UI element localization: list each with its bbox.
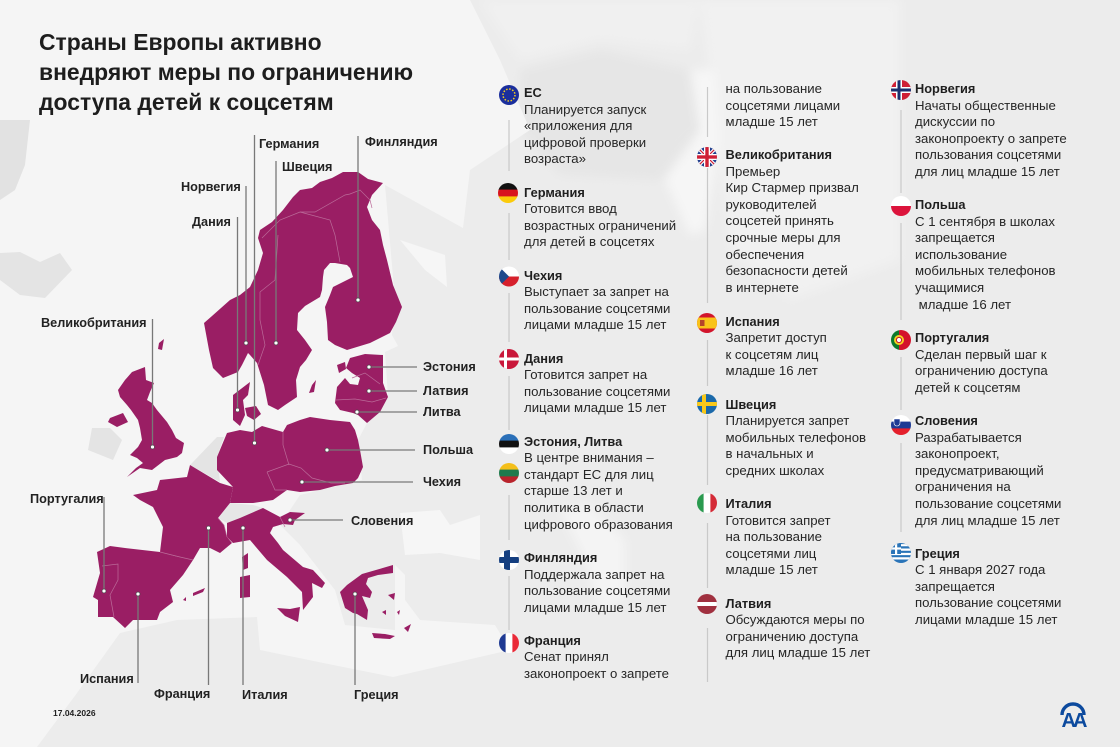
entry: Latvia: Латвия xyxy=(726,596,771,611)
entry: France continued: соцсетями лицами xyxy=(726,98,840,113)
flag: France xyxy=(499,633,519,653)
entry: Greece: С 1 января 2027 года xyxy=(915,562,1045,577)
entry: Spain: к соцсетям лиц xyxy=(726,347,818,362)
entry: France: Сенат принял xyxy=(524,649,609,664)
entry: EU: цифровой проверки xyxy=(524,135,646,150)
entry: Latvia: для лиц младше 15 лет xyxy=(726,645,870,660)
entry: Germany: Германия xyxy=(524,185,585,200)
entry: Norway: дискуссии по xyxy=(915,114,995,129)
entry: Germany xyxy=(524,185,676,249)
text: Португалия xyxy=(30,492,104,506)
text: Норвегия xyxy=(181,180,241,194)
entry: Estonia, Lithuania: стандарт ЕС для лиц xyxy=(524,467,654,482)
entry: Denmark: лицами младше 15 лет xyxy=(524,400,666,415)
entry: Slovenia: для лиц младше 15 лет xyxy=(915,513,1060,528)
entry: Italy: соцсетями лиц xyxy=(726,546,816,561)
text: Чехия xyxy=(423,475,461,489)
entry: Estonia, Lithuania: В центре внимания – xyxy=(524,450,654,465)
entry: United Kingdom: Великобритания xyxy=(726,147,832,162)
entry: United Kingdom: безопасности детей xyxy=(726,263,848,278)
title: внедряют меры по ограничению xyxy=(39,59,413,85)
flag: Denmark xyxy=(499,349,519,369)
entry: Estonia, Lithuania: старше 13 лет и xyxy=(524,483,623,498)
map: Denmark xyxy=(233,382,250,426)
flag: Lithuania xyxy=(499,463,519,483)
title xyxy=(39,29,413,115)
entry: Italy: Готовится запрет xyxy=(726,513,830,528)
entry: Portugal: ограничению доступа xyxy=(915,363,1048,378)
entry: Poland: С 1 сентября в школах xyxy=(915,214,1055,229)
map: Spain and Portugal xyxy=(93,546,193,628)
entry: EU: ЕС xyxy=(524,85,542,100)
entry: Poland: запрещается xyxy=(915,230,995,245)
map: Baltic states xyxy=(335,354,388,423)
entry: Sweden xyxy=(726,397,866,478)
text: Литва xyxy=(423,405,461,419)
flag: Finland xyxy=(499,550,519,570)
entry: Greece: Греция xyxy=(915,546,960,561)
entry: Italy: Италия xyxy=(726,496,772,511)
entry: Poland: учащимися xyxy=(915,280,984,295)
logo: Anadolu Agency: AA xyxy=(1062,710,1087,732)
entry: Czechia: Выступает за запрет на xyxy=(524,284,669,299)
text: Испания xyxy=(80,672,134,686)
text: Италия xyxy=(242,688,288,702)
entry: Latvia: Обсуждаются меры по xyxy=(726,612,865,627)
entry: Slovenia: Разрабатывается xyxy=(915,430,1022,445)
entry: Italy: на пользование xyxy=(726,529,822,544)
entry: Slovenia: ограничения на xyxy=(915,479,1011,494)
entry: Finland: Поддержала запрет на xyxy=(524,567,665,582)
entry: Greece xyxy=(915,546,1061,627)
entry: Spain: Запретит доступ xyxy=(726,330,827,345)
entry: Estonia, Lithuania xyxy=(524,434,673,532)
text: Швеция xyxy=(282,160,332,174)
flag: Poland xyxy=(891,196,911,216)
date: 17.04.2026 xyxy=(53,708,96,718)
entry: United Kingdom: в интернете xyxy=(726,280,799,295)
entry: Slovenia: пользование соцсетями xyxy=(915,496,1061,511)
entry: EU xyxy=(524,85,646,166)
entry: Denmark: Готовится запрет на xyxy=(524,367,647,382)
flag: Germany xyxy=(498,183,518,203)
entry: Norway: Норвегия xyxy=(915,81,975,96)
entry: Slovenia xyxy=(915,413,1061,528)
map: highlighted countries of Europe xyxy=(93,172,411,639)
text: Греция xyxy=(354,688,399,702)
entry: Latvia: ограничению доступа xyxy=(726,629,858,644)
entry: Norway: для лиц младше 15 лет xyxy=(915,164,1060,179)
flag: Italy xyxy=(697,493,717,513)
entry: Spain: Испания xyxy=(726,314,780,328)
entry: Poland: использование xyxy=(915,247,1007,262)
text: Польша xyxy=(423,443,473,457)
entry: Italy xyxy=(726,496,830,577)
entry: Denmark xyxy=(524,351,670,415)
entry: EU: Планируется запуск xyxy=(524,102,646,117)
flag: United Kingdom xyxy=(697,147,717,167)
entry: Slovenia: предусматривающий xyxy=(915,463,1044,478)
entry: Slovenia: законопроект, xyxy=(915,446,1000,461)
text: Франция xyxy=(154,687,210,701)
entry: France: Франция xyxy=(524,633,581,648)
entry: United Kingdom: руководителей xyxy=(726,197,817,212)
entry: Czechia: лицами младше 15 лет xyxy=(524,317,666,332)
entry: Sweden: Швеция xyxy=(726,397,776,412)
map: Scandinavia and Finland xyxy=(204,172,402,410)
entry: Greece: лицами младше 15 лет xyxy=(915,612,1057,627)
flag: Czechia xyxy=(499,266,519,286)
entry: Poland: младше 16 лет xyxy=(919,297,1011,312)
entry: Finland xyxy=(524,550,670,615)
entry: Slovenia: Словения xyxy=(915,413,978,428)
title: Страны Европы активно xyxy=(39,29,322,55)
entry: Spain xyxy=(726,314,827,378)
flag: EU xyxy=(499,85,519,105)
map: United Kingdom xyxy=(118,367,184,477)
map dots xyxy=(102,298,371,596)
entry: Portugal xyxy=(915,330,1048,395)
entry: Portugal: Португалия xyxy=(915,330,989,345)
map: Germany, Poland and Czechia xyxy=(217,417,363,503)
entry: Portugal: Сделан первый шаг к xyxy=(915,347,1047,362)
entry: Norway: пользования соцсетями xyxy=(915,147,1061,162)
map: France xyxy=(133,465,233,560)
entry: Denmark: Дания xyxy=(524,351,563,366)
flag: Slovenia xyxy=(891,415,911,435)
entry: United Kingdom: Премьер xyxy=(726,164,780,179)
entry: Norway: законопроекту о запрете xyxy=(915,131,1067,146)
flag: Estonia xyxy=(499,434,519,454)
entry: Denmark: пользование соцсетями xyxy=(524,384,670,399)
flag: Norway xyxy=(891,80,911,100)
entry: Germany: возрастных ограничений xyxy=(524,218,676,233)
entry: Germany: Готовится ввод xyxy=(524,201,617,216)
entry: United Kingdom: срочные меры для xyxy=(726,230,841,245)
map leaders: country pointers xyxy=(104,135,417,685)
entry: Estonia, Lithuania: политика в области xyxy=(524,500,644,515)
entry: Finland: лицами младше 15 лет xyxy=(524,600,666,615)
entry: Sweden: мобильных телефонов xyxy=(726,430,866,445)
entry: United Kingdom: соцсетей принять xyxy=(726,213,834,228)
entry: Poland: Польша xyxy=(915,197,965,212)
title: доступа детей к соцсетям xyxy=(39,89,334,115)
text: Эстония xyxy=(423,360,476,374)
entry: Sweden: в начальных и xyxy=(726,446,814,461)
entry: Finland: пользование соцсетями xyxy=(524,583,670,598)
entry: Poland xyxy=(915,197,1056,312)
entry: Poland: мобильных телефонов xyxy=(915,263,1056,278)
text: Дания xyxy=(192,215,231,229)
entry: Portugal: детей к соцсетям xyxy=(915,380,1020,395)
entry: United Kingdom xyxy=(726,147,859,295)
entry: Spain: младше 16 лет xyxy=(726,363,818,378)
entry: Sweden: Планируется запрет xyxy=(726,413,849,428)
entry: Greece: пользование соцсетями xyxy=(915,595,1061,610)
entry: EU: «приложения для xyxy=(524,118,632,133)
text: Словения xyxy=(351,514,413,528)
entry: Estonia, Lithuania: цифрового образования xyxy=(524,517,673,532)
entry: Czechia xyxy=(524,268,670,332)
entry: France continued: младше 15 лет xyxy=(726,114,818,129)
entry: France: законопроект о запрете xyxy=(524,666,669,681)
entry: Norway xyxy=(915,81,1067,179)
map: Greece xyxy=(340,565,393,620)
text: Великобритания xyxy=(41,316,147,330)
map: Italy and Slovenia xyxy=(227,508,325,610)
entry: United Kingdom: обеспечения xyxy=(726,247,804,262)
entry: Czechia: пользование соцсетями xyxy=(524,301,670,316)
entry: Germany: для детей в соцсетях xyxy=(524,234,654,249)
entry: Norway: Начаты общественные xyxy=(915,98,1056,113)
entry: France continued: на пользование xyxy=(726,81,822,96)
entry: Estonia, Lithuania: Эстония, Литва xyxy=(524,434,622,449)
flag: Spain xyxy=(697,313,717,333)
entry: Finland: Финляндия xyxy=(524,550,597,565)
map: internal borders xyxy=(102,190,386,617)
flag: Latvia xyxy=(697,594,717,614)
map labels: Германия xyxy=(259,137,319,151)
entry: Greece: запрещается xyxy=(915,579,995,594)
flag: Greece xyxy=(891,543,911,563)
flag: Sweden xyxy=(697,394,717,414)
flag: Portugal xyxy=(891,330,911,350)
entry: EU: возраста» xyxy=(524,151,586,166)
entry: France continued xyxy=(726,81,840,129)
timeline connector lines xyxy=(509,87,901,682)
text: Финляндия xyxy=(365,135,438,149)
entry: Italy: младше 15 лет xyxy=(726,562,818,577)
text: Латвия xyxy=(423,384,468,398)
entry: Latvia xyxy=(726,596,870,660)
entry: France xyxy=(524,633,669,681)
entry: United Kingdom: Кир Стармер призвал xyxy=(726,180,859,195)
entry: Czechia: Чехия xyxy=(524,268,562,283)
entry: Sweden: средних школах xyxy=(726,463,824,478)
